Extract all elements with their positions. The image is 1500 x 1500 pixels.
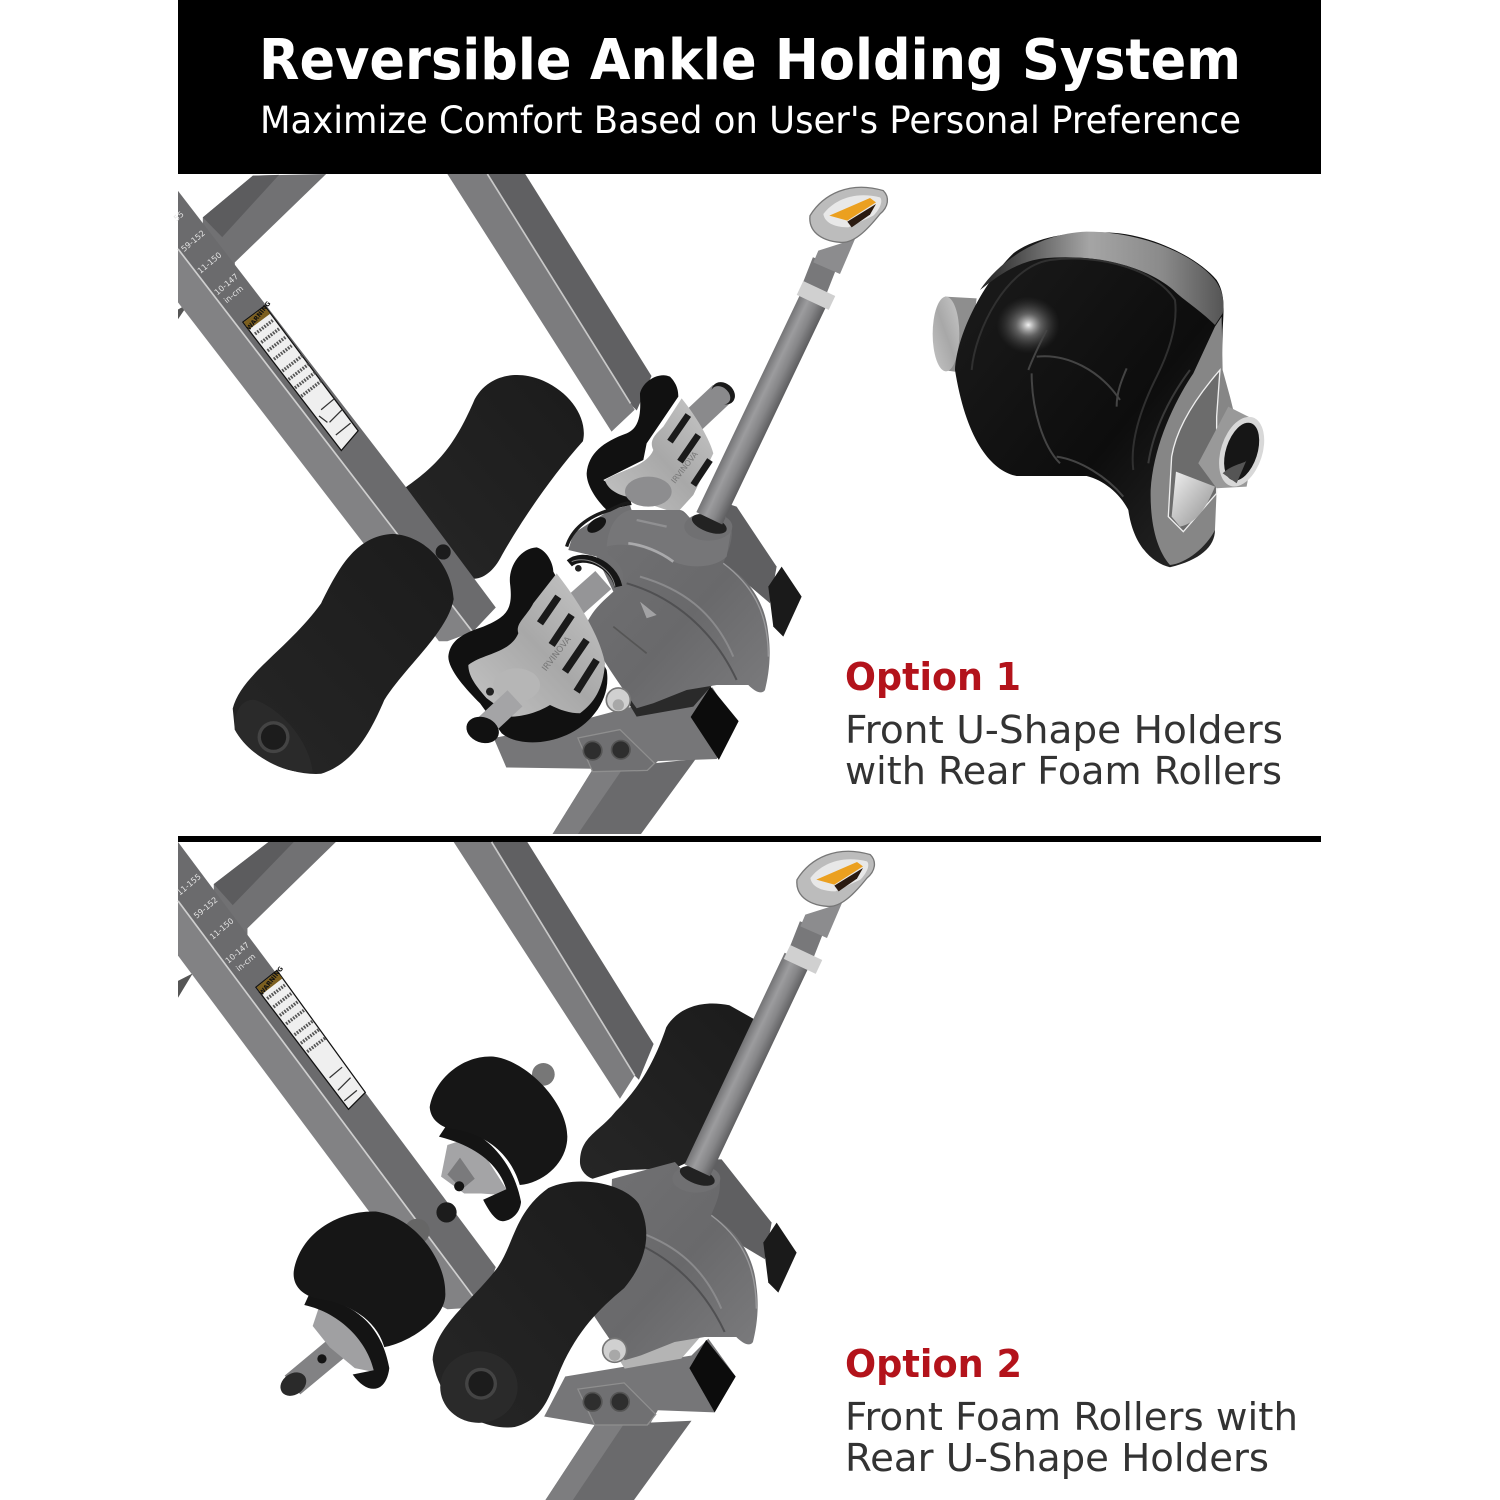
title: Reversible Ankle Holding System <box>259 28 1241 93</box>
rear axle <box>683 378 739 430</box>
handle collar <box>800 288 832 303</box>
front U-shape holder <box>448 547 607 748</box>
option 2 heading: Option 2 <box>845 1342 1022 1386</box>
height scale markings: 11-150 <box>208 916 236 941</box>
main rail with height scale <box>172 191 496 641</box>
front axle <box>573 580 603 607</box>
height scale markings: 59-152 <box>180 229 207 254</box>
upper tube <box>801 926 812 954</box>
front U-shape holder: IRVINOVA <box>540 635 574 673</box>
rear foam roller <box>405 375 584 579</box>
grip head <box>810 187 887 242</box>
rear U-shape holder: IRVINOVA <box>669 449 700 485</box>
caption: option 2 <box>845 1342 1298 1480</box>
lower U-shape holder <box>276 1212 445 1401</box>
rear collar housing <box>568 505 640 592</box>
hub shell <box>587 510 770 708</box>
rail behind hub <box>723 503 777 603</box>
option 2 description: Rear U-Shape Holders <box>845 1436 1269 1480</box>
height scale markings: 11-155 <box>175 872 203 897</box>
warning sticker: WARNING <box>246 300 272 332</box>
handle collar <box>787 952 819 967</box>
option 1 description <box>845 708 1283 793</box>
option 1 heading: Option 1 <box>845 655 1021 699</box>
mounting bracket <box>494 687 739 772</box>
rear U-shape holder <box>587 375 713 513</box>
height scale markings <box>172 210 245 305</box>
upper tube <box>814 262 825 290</box>
rear foam roller <box>580 1003 761 1179</box>
mounting bracket <box>544 1339 736 1425</box>
silver insert <box>1172 472 1215 527</box>
photo: option 2 inversion frame <box>175 842 761 1500</box>
rear U-shape holder <box>430 1057 567 1221</box>
photo: option 1 inversion frame <box>172 174 739 834</box>
lower rail <box>553 759 696 834</box>
neck <box>800 903 842 938</box>
product detail: U-shape holder <box>933 232 1272 567</box>
axle tube <box>1198 407 1272 492</box>
rail bolts <box>436 1202 457 1222</box>
height scale markings: in-cm <box>222 284 245 305</box>
crossbar <box>178 842 336 998</box>
height scale markings: 55 <box>172 210 186 223</box>
inner recess <box>1168 370 1220 532</box>
rear black stop <box>768 567 802 637</box>
front foam roller <box>233 534 454 774</box>
hub nut <box>603 1338 627 1362</box>
rail and stop behind hub: option 2 <box>698 1159 797 1293</box>
main rail with height scale <box>175 842 496 1309</box>
hub shell <box>575 1162 758 1360</box>
header band <box>178 0 1321 174</box>
moulded ridges <box>1028 330 1127 497</box>
hub, holders and handle assembly: option 1 <box>448 297 815 748</box>
handle grip: option 1 <box>800 187 887 303</box>
height scale markings: 10-147 <box>213 272 240 297</box>
option 1 description: with Rear Foam Rollers <box>845 749 1282 793</box>
height scale markings: 11-150 <box>196 250 223 276</box>
left pin <box>933 297 977 373</box>
front collar <box>569 559 618 587</box>
lower rail <box>544 1421 691 1500</box>
holder body <box>955 232 1224 567</box>
neck <box>813 239 855 274</box>
subtitle: Maximize Comfort Based on User's Personal Preference <box>260 99 1241 142</box>
hub and handle assembly: option 2 <box>575 959 797 1369</box>
rail bolt <box>436 544 451 560</box>
grey outer plate <box>1151 317 1233 565</box>
warning sticker <box>243 300 358 451</box>
inner shell edge <box>972 259 1176 470</box>
handle grip: option 2 <box>787 851 874 967</box>
top cap <box>980 232 1223 325</box>
black band highlight <box>1148 370 1190 463</box>
grip label <box>823 195 881 227</box>
divider line <box>178 836 1321 842</box>
hub nut <box>606 688 630 712</box>
rail behind hub <box>698 1159 772 1259</box>
pull handle tube <box>684 297 815 541</box>
grip label <box>810 859 868 891</box>
option 2 description <box>845 1395 1298 1480</box>
warning sticker: WARNING <box>258 965 285 997</box>
height scale markings: in-cm <box>234 952 257 973</box>
option 1 description: Front U-Shape Holders <box>845 708 1283 752</box>
mechanism under hub <box>615 1332 705 1369</box>
pull handle tube <box>672 959 797 1193</box>
right rail <box>454 842 654 1099</box>
option 2 description: Front Foam Rollers with <box>845 1395 1298 1439</box>
rear collar <box>567 503 630 547</box>
warning sticker <box>256 965 365 1109</box>
height scale markings: 10-147 <box>224 940 251 965</box>
crossbar <box>178 174 326 319</box>
right rail <box>447 174 652 432</box>
front foam roller: option 2 <box>433 1181 646 1428</box>
specular highlight <box>997 297 1060 353</box>
grip head <box>797 851 874 906</box>
height scale markings: 59-152 <box>192 895 220 920</box>
caption: option 1 <box>845 655 1283 793</box>
height scale markings <box>175 872 257 973</box>
dark gap under hub <box>627 680 717 717</box>
rear black stop <box>763 1223 797 1293</box>
